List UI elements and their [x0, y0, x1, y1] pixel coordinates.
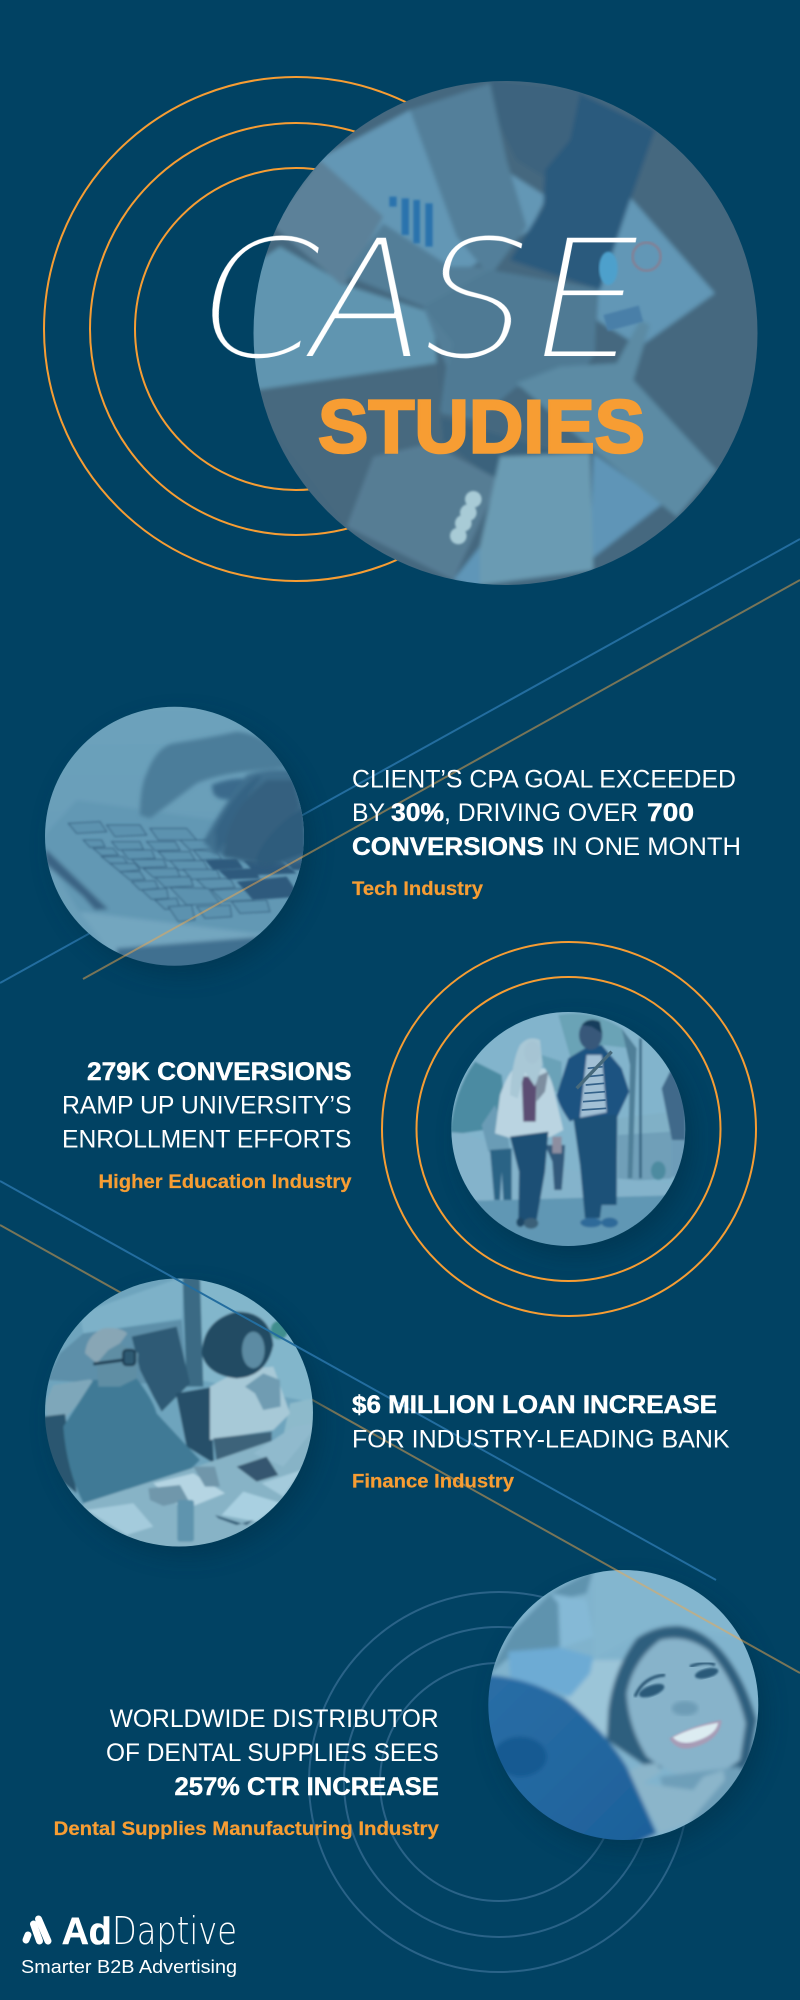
case study 1: tech: , DRIVING OVER: [444, 800, 638, 827]
case study 3: finance: $6 MILLION LOAN INCREASE: [352, 1392, 717, 1419]
logo: AdDaptive: [21, 1909, 237, 1977]
logo: AdDaptive: Ad: [62, 1911, 112, 1953]
case study 1: tech: 30%: [391, 800, 444, 827]
case study 1: tech: [352, 766, 741, 900]
case study 1: tech: CLIENT’S CPA GOAL EXCEEDED: [352, 766, 736, 794]
title: STUDIES: STUDIES: [318, 384, 645, 468]
case study 1: tech: BY: [352, 800, 385, 827]
hero photo: stacked hands over a table: [247, 77, 767, 597]
bars on right paper: [603, 306, 643, 331]
icon: logo mark: [26, 1919, 48, 1941]
case study 4: dental supplies: OF DENTAL SUPPLIES SEES: [106, 1740, 439, 1767]
diagonal orange line upper: [83, 580, 800, 979]
eyes and brows: [635, 1675, 665, 1697]
case study 2: higher education: RAMP UP UNIVERSITY’S: [62, 1092, 352, 1120]
case study 3: finance: FOR INDUSTRY-LEADING BANK: [352, 1426, 730, 1453]
concentric orange rings around students photo: [382, 942, 756, 1316]
chart bars on paper: [389, 197, 433, 247]
case study 4: dental supplies: WORLDWIDE DISTRIBUTOR: [110, 1706, 439, 1733]
case study 3: finance: [352, 1392, 730, 1492]
photo: hands typing on laptop: [40, 700, 310, 970]
photo: two students walking on campus: [451, 1012, 686, 1246]
sleeve buttons: [450, 491, 482, 544]
case study 2: higher education: 279K CONVERSIONS: [87, 1059, 352, 1086]
case study 2: higher education: ENROLLMENT EFFORTS: [62, 1127, 352, 1154]
photo: smiling dental patient: [488, 1570, 758, 1840]
case study 1: tech: Tech Industry: [352, 879, 483, 900]
case study 1: tech: 700: [647, 800, 694, 827]
case study 1: tech: IN ONE MONTH: [552, 834, 741, 861]
laptop photo shadow: [53, 717, 311, 975]
hands: [140, 732, 307, 867]
pie chart on paper: [633, 243, 661, 271]
hero orange concentric rings: [44, 77, 548, 581]
case study 1: tech: CONVERSIONS: [352, 834, 544, 861]
students photo shadow: [459, 1022, 693, 1256]
faint concentric rings behind dental photo: [309, 1592, 689, 1972]
photo: man and woman in business meeting: [40, 1270, 320, 1550]
keyboard keys: [68, 822, 270, 922]
case study 3: finance: Finance Industry: [352, 1472, 514, 1492]
diagonal blue line upper: [0, 539, 800, 983]
case study 4: dental supplies: Dental Supplies Manufacturing Industry: [54, 1819, 439, 1840]
case study 4: dental supplies: [54, 1706, 439, 1840]
finance photo shadow: [53, 1288, 321, 1556]
case study 2: higher education: Higher Education Industry: [98, 1172, 352, 1193]
case study 4: dental supplies: 257% CTR INCREASE: [174, 1774, 439, 1801]
logo: AdDaptive: Daptive: [112, 1909, 237, 1953]
smile: [669, 1720, 722, 1749]
diagonal orange line lower: [0, 1225, 800, 1673]
dark keys near hand: [205, 858, 302, 901]
case study 2: higher education: [62, 1059, 352, 1193]
dental photo shadow: [495, 1581, 765, 1851]
diagonal blue line lower: [0, 1181, 716, 1580]
title: CASE: CASE: [179, 205, 661, 397]
logo: AdDaptive: Smarter B2B Advertising: [21, 1956, 237, 1977]
